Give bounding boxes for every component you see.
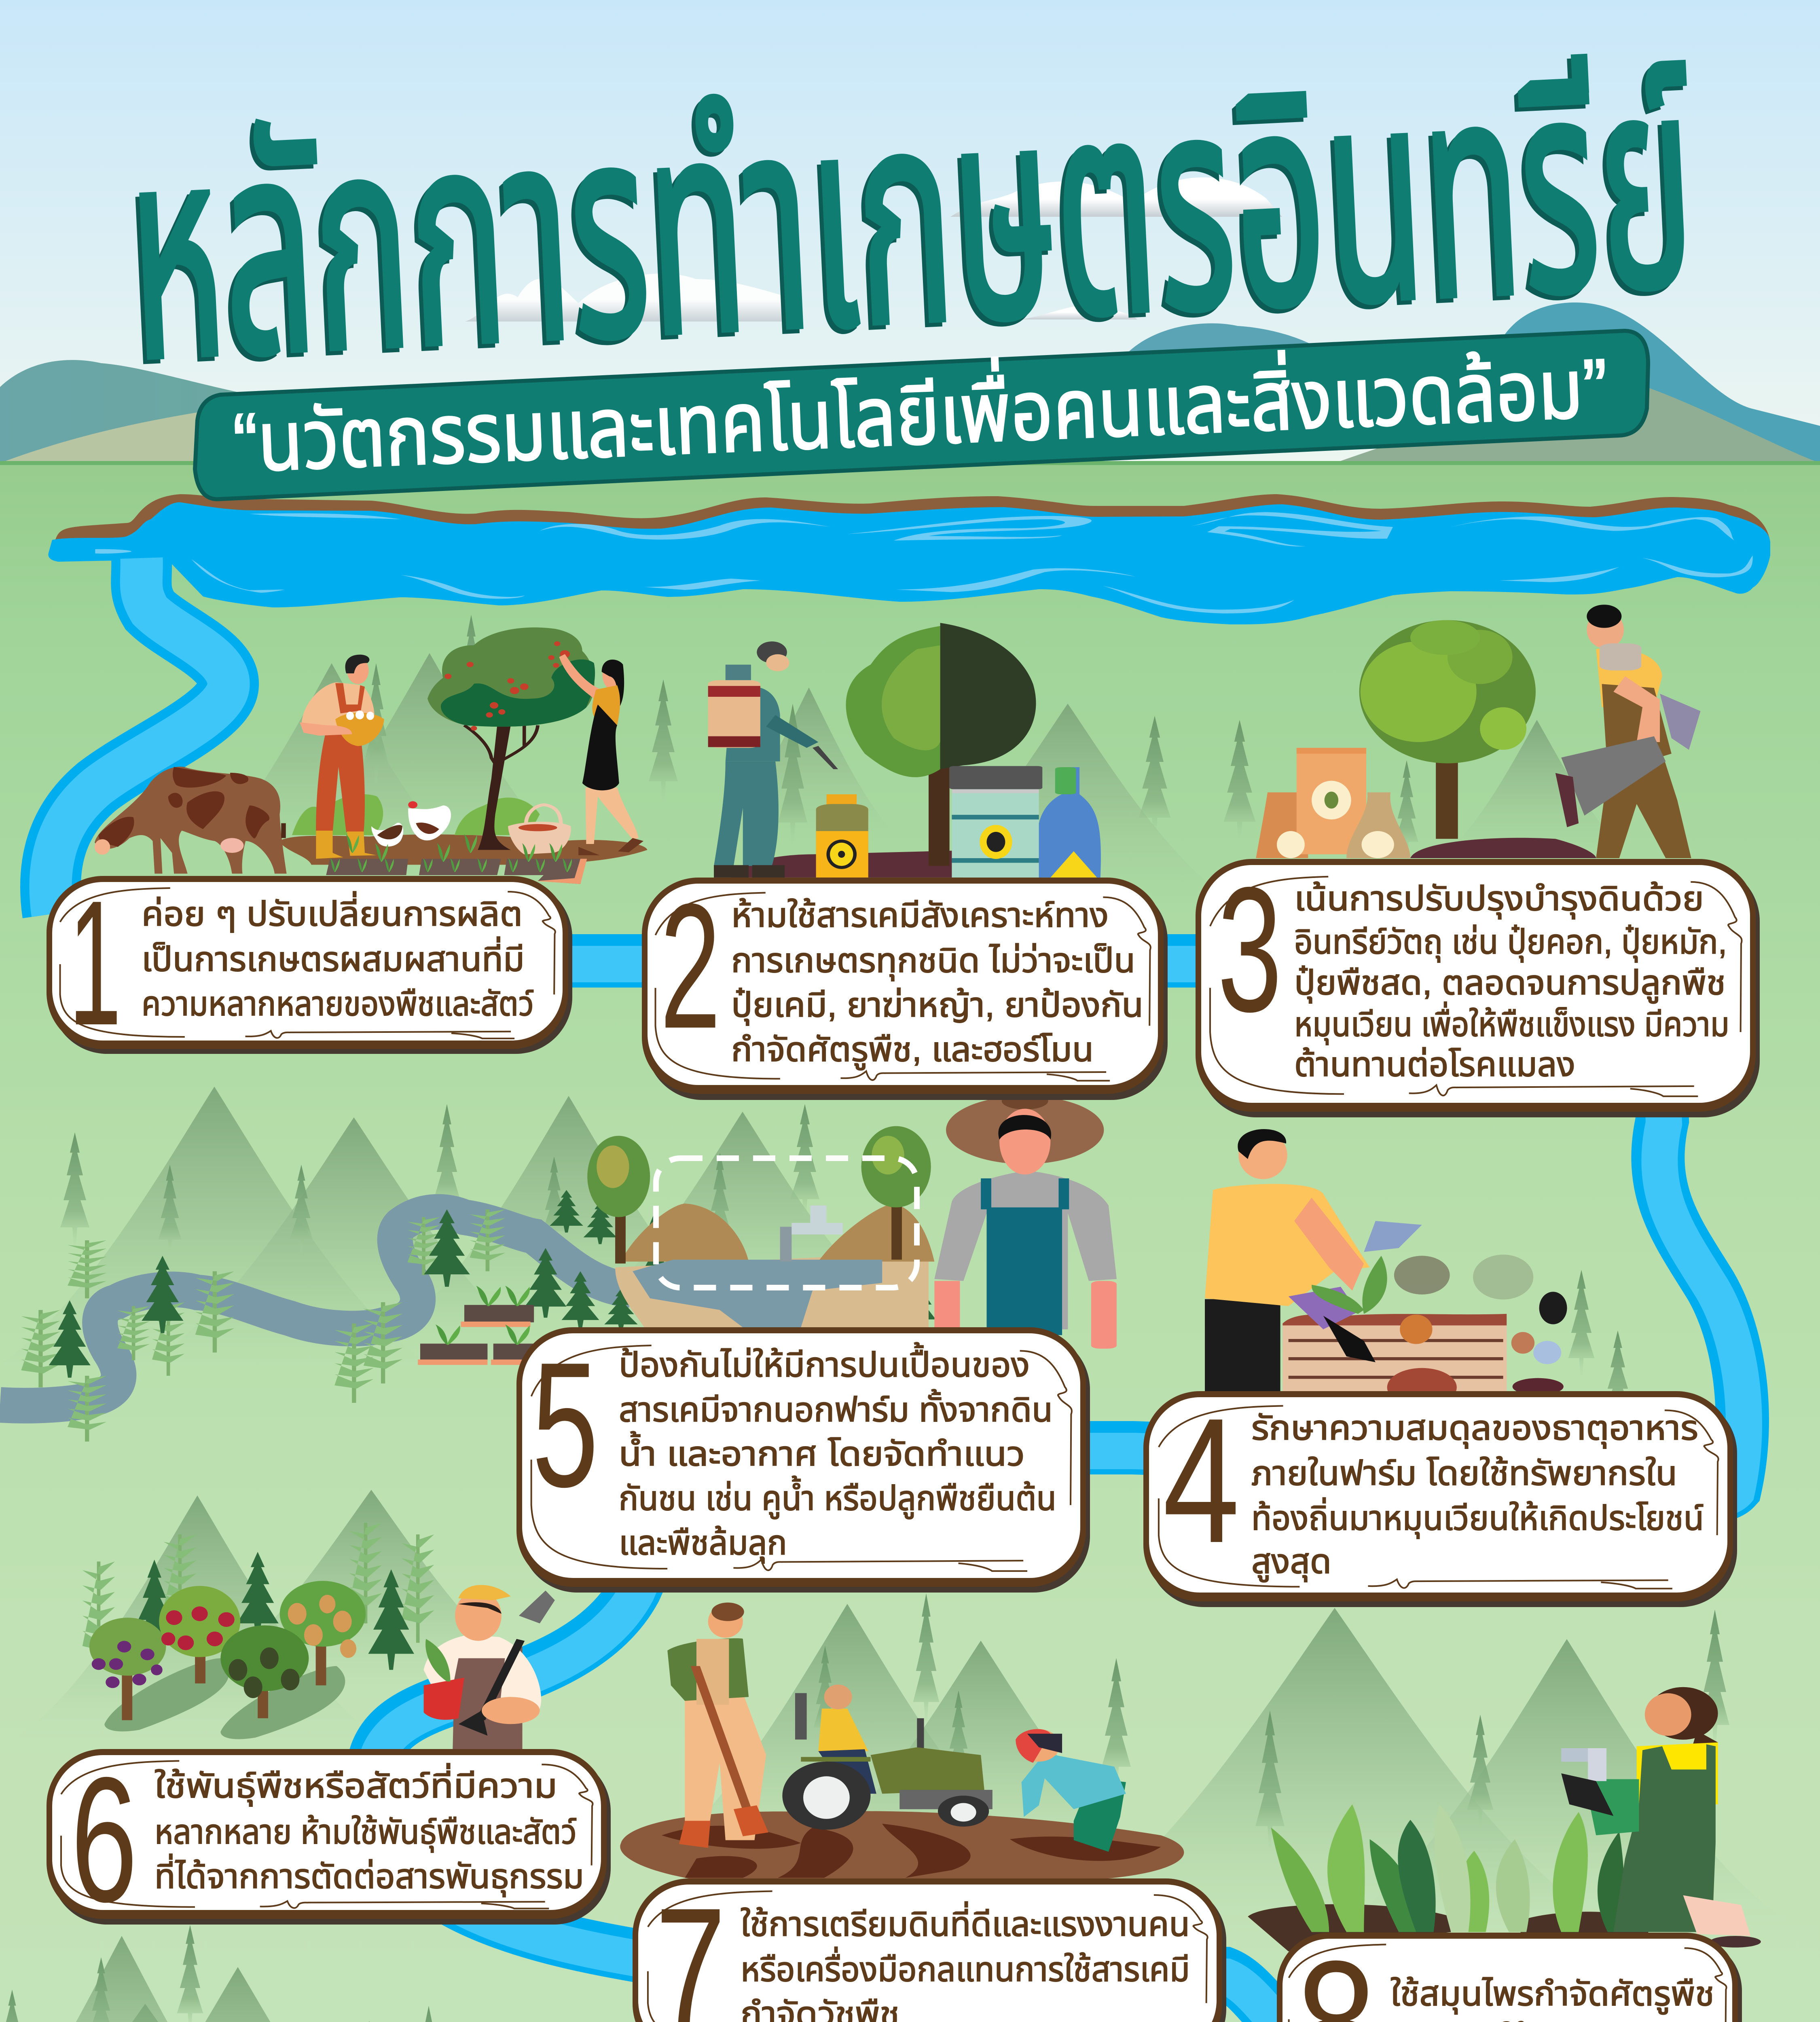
panel 7 illustration: soil preparation with labour [620,1603,1184,1880]
soil patch [279,834,648,865]
hazard bottle [816,794,868,878]
hazard jar [950,766,1042,878]
card 4 text: ภายในฟาร์ม โดยใช้ทรัพยากรใน [1251,1454,1677,1492]
card 4 [1143,1381,1737,1607]
card 2 text: กำจัดศัตรูพืช, และฮอร์โมน [731,1030,1094,1070]
bamboo and dark pines [21,1190,936,1442]
green tree [1359,620,1536,839]
number 1: 1 [69,864,121,1062]
fertiliser bags [1256,748,1410,858]
card 8 [1277,1924,1742,2022]
back mountains [0,302,1820,463]
card 2 [642,867,1168,1100]
contaminated water [633,1260,882,1327]
card 6 text: ใช้พันธุ์พืชหรือสัตว์ที่มีความ [154,1763,557,1806]
woman picking fruit [559,654,643,855]
compost crate [1282,1314,1564,1407]
mountains and pine forest backdrop [0,615,1789,2022]
card 6 text [154,1763,584,1897]
card 2 text: การเกษตรทุกชนิด ไม่ว่าจะเป็น [731,941,1135,981]
cow [95,767,287,874]
card 8 text: ใช้สมุนไพรกำจัดศัตรูพืช [1390,1975,1714,2014]
ground [0,462,1820,2022]
waterfall river from lake to card 1 [51,558,229,914]
card 5 text [619,1342,1056,1563]
card 7 [633,1871,1226,2022]
dark soil pots [1248,1904,1648,1951]
card 2 text: ปุ๋ยเคมี, ยาฆ่าหญ้า, ยาป้องกัน [731,986,1143,1026]
card 3 text: ปุ๋ยพืชสด, ตลอดจนการปลูกพืช [1294,964,1726,1003]
card 1 text: ความหลากหลายของพืชและสัตว์ [142,985,534,1023]
card 5 text: และพืชล้มลุก [619,1524,787,1563]
card 1 text: เป็นการเกษตรผสมผสานที่มี [142,937,525,978]
pipe and faucet [780,1206,843,1262]
card 4 text: ท้องถิ่นมาหมุนเวียนให้เกิดประโยชน์ [1251,1497,1704,1539]
farmer pouring compost [1555,605,1701,858]
panel 5 illustration: buffer zone [21,1092,1117,1442]
lake with earth bank [48,494,1770,624]
panel 6 illustration: fruit tree varieties [83,1523,555,1749]
half green half dead tree [846,623,1036,866]
ploughed soil [620,1811,1184,1880]
fruit tree [427,627,595,850]
sky background [0,0,1820,463]
subtitle banner: “นวัตกรรมและเทคโนโลยีเพื่อคนและสิ่งแวดล้อม” [231,333,1609,489]
seedling planters [326,834,587,884]
card 5 text: ป้องกันไม่ให้มีการปนเปื้อนของ [619,1342,1030,1384]
blue chemical jug [1039,767,1101,878]
card 2 text: ห้ามใช้สารเคมีสังเคราะห์ทาง [731,896,1109,934]
gardener in yellow shirt [1205,1129,1387,1391]
panel 2 illustration: no chemicals [708,623,1101,878]
card 1 text: ค่อย ๆ ปรับเปลี่ยนการผลิต [142,891,523,933]
soil mounds [621,1203,934,1262]
card 4 text: รักษาความสมดุลของธาตุอาหาร [1251,1409,1698,1449]
card 4 text: สูงสุด [1251,1542,1331,1582]
card 4 text [1251,1409,1704,1582]
panel 8 illustration: herbal spray [1248,1687,1761,1951]
number 2: 2 [660,867,721,1066]
tan ground [615,1252,929,1327]
man with egg basket [300,655,384,859]
polluted grey stream [0,1212,631,1406]
man digging with shovel [667,1603,768,1848]
card 5 text: สารเคมีจากนอกฟาร์ม ทั้งจากดิน [619,1389,1053,1429]
card 3 [1196,850,1760,1117]
panel 4 illustration: compost [1205,1129,1567,1407]
orchard backdrop [83,1523,434,1739]
bushes [292,794,540,835]
trees beside the pond [587,1126,931,1263]
number 3: 3 [1217,850,1282,1049]
card 6 [47,1741,611,1939]
number 5: 5 [532,1326,599,1524]
soil [731,850,963,878]
durian tree [220,1625,309,1718]
woman weeding [1016,1729,1126,1852]
card 1 text [142,891,534,1023]
panel 1 illustration: mixed farm [95,627,648,884]
farmer with straw hat [934,1092,1117,1349]
number 4: 4 [1163,1381,1240,1580]
plum tree [89,1618,166,1720]
card 7 text [741,1901,1190,2022]
farmer with seedling and shovel [424,1585,555,1749]
card 5 text: น้ำ และอากาศ โดยจัดทำแนว [619,1431,1025,1473]
main winding river [343,961,1744,2022]
rambutan tree [159,1586,240,1684]
card 7 text: ใช้การเตรียมดินที่ดีและแรงงานคน [741,1901,1190,1943]
card 2 text [731,896,1143,1070]
compost materials [1364,1221,1567,1364]
card 3 text: ต้านทานต่อโรคแมลง [1294,1045,1575,1083]
dashed buffer boundary [656,1158,917,1288]
card 3 text: เน้นการปรับปรุงบำรุงดินด้วย [1294,880,1704,919]
card 6 text: หลากหลาย ห้ามใช้พันธุ์พืชและสัตว์ [154,1813,577,1853]
basket of fruit [508,805,571,854]
card 3 text: อินทรีย์วัตถุ เช่น ปุ๋ยคอก, ปุ๋ยหมัก, [1294,923,1727,962]
cloud group [465,178,1282,321]
card 3 text: หมุนเวียน เพื่อให้พืชแข็งแรง มีความ [1294,1002,1729,1045]
panel 3 illustration: soil improvement [1256,605,1701,858]
card 5 text: กันชน เช่น คูน้ำ หรือปลูกพืชยืนต้น [619,1476,1056,1519]
seedling planters [418,1286,540,1365]
longan tree [280,1581,366,1686]
chickens [371,801,451,846]
compost soil [1410,838,1596,858]
tractor with driver [782,1685,993,1830]
card 3 text [1294,880,1729,1083]
woman spraying herbal extract [1561,1687,1761,1948]
herb leaves [1271,1804,1625,1932]
card 1 [47,864,572,1062]
number 6: 6 [71,1741,138,1939]
card 5 [516,1326,1090,1593]
card 7 text: หรือเครื่องมือกลแทนการใช้สารเคมี [741,1947,1190,1988]
card 6 text: ที่ได้จากการตัดต่อสารพันธุกรรม [154,1854,584,1897]
man spraying chemicals [708,641,838,878]
